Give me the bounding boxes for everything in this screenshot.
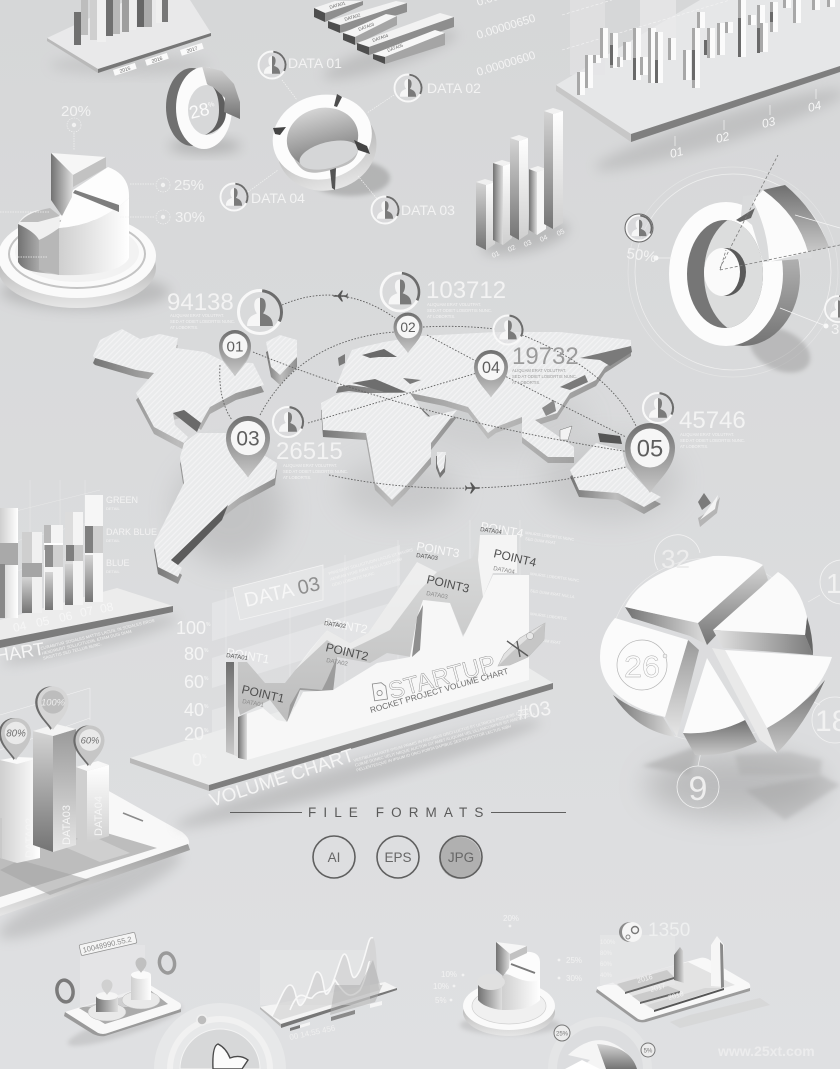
tablet axis: 40% — [600, 973, 613, 979]
circle 26 percent: 26 — [624, 649, 660, 684]
chart base platform — [130, 650, 553, 791]
header caption: ODIO LOBORTIS NUNC — [331, 570, 375, 587]
callout 26515: 26515 — [276, 438, 343, 465]
wedge top right — [713, 572, 813, 655]
callout 26515: AT LOBORTIS. — [283, 475, 311, 480]
data 03 header — [233, 565, 323, 620]
big ring chart right — [625, 155, 840, 382]
header caption: PRAESENT SOLLICITUDIN LACUS UT MAURIS — [328, 547, 414, 576]
pin 04: 04 — [482, 359, 500, 377]
callout 94138: SED AT ODIET LOBORTIS NUNC. — [170, 319, 235, 324]
column labels: 04 — [539, 234, 549, 244]
bar 03 — [0, 508, 18, 618]
bar data 04: DATA04 — [93, 796, 105, 836]
year labels: 2016 — [151, 56, 164, 65]
watermark: www.25xt.com — [717, 1043, 815, 1059]
format badge JPG: JPG — [448, 850, 474, 865]
column labels: 02 — [507, 244, 517, 254]
bar data 02 — [0, 757, 40, 863]
icon 50 percent — [625, 214, 653, 242]
axis percent labels — [176, 618, 211, 770]
mini pie labels: 10% — [433, 982, 449, 991]
column 03 — [510, 135, 528, 240]
data 03 header: DATA 03 — [242, 573, 322, 612]
exploded pie chart right — [600, 535, 840, 820]
badge right: 5% — [644, 1048, 653, 1054]
left columns — [226, 662, 247, 760]
data 02 label: DATA 02 — [427, 80, 481, 96]
axis numbers — [668, 98, 823, 161]
plane left — [333, 290, 348, 302]
donut label: 28 — [187, 99, 211, 123]
year labels — [113, 43, 204, 77]
axis percent labels: 100 — [176, 618, 206, 638]
right captions — [525, 530, 580, 645]
point labels upper: POINT4 — [479, 519, 525, 541]
africa — [321, 393, 457, 507]
wedge lower right — [712, 648, 832, 753]
badge 25 percent: 25% — [556, 1032, 569, 1038]
icon right edge — [825, 296, 840, 322]
axis numbers: 07 — [79, 603, 95, 620]
greenland — [266, 335, 297, 385]
circle 32 — [655, 535, 700, 574]
column 01 — [476, 179, 495, 250]
mini phone chart bottom — [55, 932, 185, 1053]
axis numbers: 03 — [760, 114, 777, 131]
numeric axis labels top — [475, 0, 537, 79]
chart legend: BLUE — [106, 558, 130, 568]
candlestick chart top right — [556, 0, 840, 181]
format badge EPS: EPS — [384, 850, 412, 865]
popped sector face — [753, 190, 808, 262]
point labels upper: POINT1 — [225, 645, 271, 667]
document icon — [372, 682, 388, 701]
pin 04 — [474, 350, 508, 398]
pie on round base, left — [0, 103, 205, 310]
point labels lower: POINT1 — [240, 682, 286, 706]
bar 07 — [85, 495, 103, 602]
pin 80 percent — [0, 718, 31, 760]
wedge left — [600, 618, 699, 737]
point labels lower: POINT2 — [324, 640, 370, 664]
tablet axis: 80% — [600, 951, 613, 957]
right captions: MAURIS LOBORTIS NUNC — [525, 530, 575, 542]
data labels upper: DATA02 — [324, 621, 347, 630]
pin 80 percent: 80% — [6, 729, 26, 740]
pin 03: 03 — [236, 427, 260, 450]
bar data 03 — [33, 724, 76, 852]
bottom circular graphic right — [548, 1017, 655, 1069]
bar data 03: DATA03 — [61, 805, 73, 845]
pie percent labels: 30% — [175, 209, 205, 226]
tablet year bars: 2016 — [637, 974, 654, 985]
chart legend: DETAIL — [106, 506, 120, 511]
axis numbers: 06 — [58, 608, 74, 625]
thin outline rings — [610, 558, 820, 766]
data 01 label — [258, 52, 342, 78]
small ring left — [55, 979, 75, 1003]
pin 60 percent: 60% — [81, 734, 99, 745]
small ring right — [158, 952, 176, 974]
tablet year bars: 2018 — [668, 991, 685, 1002]
block 1 — [314, 0, 363, 22]
circle right bottom — [812, 697, 840, 743]
block 5 — [373, 30, 445, 64]
data labels upper: DATA03 — [416, 553, 439, 562]
column 04 — [529, 166, 546, 235]
mini area chart bottom — [260, 938, 397, 1042]
right captions: SED DIAM ERAT — [530, 636, 562, 645]
column labels: 05 — [556, 228, 566, 238]
axis percent labels: 0 — [192, 750, 202, 770]
bar 04 — [22, 532, 42, 613]
pie percent labels — [0, 103, 205, 257]
bar 06 — [65, 512, 83, 605]
block 4: DATA04 — [372, 33, 389, 43]
right captions: MAURIS LOBORTIS — [530, 611, 567, 621]
pin 02: 02 — [400, 320, 416, 335]
number 03 label: #03 — [516, 697, 553, 725]
3d column chart centre — [476, 108, 572, 262]
axis numbers: 04 — [806, 98, 823, 115]
callout 19732: SED AT ODIET LOBORTIS NUNC. — [512, 374, 577, 379]
year labels: 2017 — [186, 46, 199, 55]
format badge AI — [313, 836, 355, 878]
startup label: STARTUP — [386, 650, 499, 705]
right captions: SED DIAM ERAT — [525, 536, 557, 545]
pie percent labels: 25% — [174, 177, 204, 194]
axis percent labels: % — [204, 728, 209, 734]
volume area chart centre — [130, 519, 580, 839]
world map — [93, 273, 746, 584]
chart legend: GREEN — [106, 495, 138, 505]
data labels lower: DATA04 — [493, 566, 516, 576]
candles shaded side — [577, 0, 830, 95]
point labels lower — [240, 546, 538, 706]
axis percent labels: 20 — [184, 724, 204, 744]
gear icon — [619, 922, 642, 942]
axis percent labels: % — [204, 676, 209, 682]
data 02 label — [394, 74, 481, 102]
point labels upper — [225, 519, 525, 667]
chart front surface — [238, 575, 529, 760]
file formats heading: FILE FORMATS — [308, 805, 490, 820]
callout 26515: SED AT ODIET LOBORTIS NUNC. — [283, 469, 348, 474]
australia — [570, 443, 661, 514]
pin 03 — [226, 416, 270, 478]
column 05 — [544, 108, 563, 229]
connector lines — [248, 80, 394, 200]
tablet axis: 60% — [600, 962, 613, 968]
mini pie labels: 30% — [566, 974, 582, 983]
bar 05 — [44, 525, 63, 610]
volume caption: PELLENTESQUE IN IPSUM ID ORCI PORTA DAPIBUS SED PORTTITOR LECTUS NIBH — [356, 723, 512, 773]
axis percent labels: % — [202, 754, 207, 760]
point labels lower: POINT3 — [425, 572, 471, 596]
stacked bar chart left — [0, 480, 180, 671]
block 3 — [343, 14, 397, 45]
column labels — [491, 228, 566, 260]
data labels upper: DATA01 — [226, 653, 249, 662]
numeric axis labels top: 0.00000600 — [475, 50, 537, 79]
chart legend: DARK BLUE — [106, 527, 157, 537]
tall cylinder — [122, 958, 160, 1009]
axis percent labels: % — [204, 704, 209, 710]
north america — [93, 329, 264, 450]
tablet axis: 100% — [600, 940, 616, 946]
ring gap — [741, 190, 812, 262]
callout 19732 — [494, 316, 579, 385]
right percent label: 3 — [831, 321, 839, 338]
pin 60 percent — [73, 726, 104, 766]
translucent bands — [212, 545, 400, 736]
new zealand — [698, 493, 720, 527]
mini chart legend: 00 14:55 456 — [289, 1023, 337, 1042]
callout 45746: ALIQUAM ERAT VOLUTPAT. — [680, 432, 734, 437]
rocket project label: ROCKET PROJECT VOLUME CHART — [369, 666, 509, 715]
wedge bottom — [683, 658, 757, 755]
callout 45746: 45746 — [679, 407, 746, 434]
circle right top — [820, 560, 840, 604]
tablet arrow bars — [674, 936, 724, 988]
circle 9 — [677, 766, 719, 808]
flight paths — [220, 295, 637, 488]
chart caption: SAGITTIS SED TELLUS NUNC. — [42, 641, 102, 661]
callout 45746: SED AT ODIET LOBORTIS NUNC. — [680, 438, 745, 443]
axis percent labels: 60 — [184, 672, 204, 692]
data labels lower: DATA01 — [242, 699, 265, 709]
callout 19732: ALIQUAM ERAT VOLUTPAT. — [512, 368, 566, 373]
data 04 label: DATA 04 — [251, 190, 305, 206]
mini tablet chart bottom — [596, 920, 770, 1028]
callout 94138: AT LOBORTIS. — [170, 325, 198, 330]
ring face — [669, 202, 783, 346]
wedge top left — [625, 556, 768, 645]
pin 01 — [219, 330, 251, 376]
pin 02 — [394, 312, 422, 353]
chart legend: DETAIL — [106, 538, 120, 543]
indonesia — [560, 426, 622, 444]
chart caption: CURABITUR SODALES MATTIS LACUS, IN SODALES EROS — [40, 618, 155, 651]
callout 94138 — [167, 289, 282, 334]
callout 103712: ALIQUAM ERAT VOLUTPAT. — [427, 302, 481, 307]
bar data 02: DATA02 — [24, 818, 36, 858]
pin 05: 05 — [637, 436, 663, 463]
pie percent labels: 20% — [61, 103, 91, 120]
data 01 label: DATA 01 — [288, 55, 342, 71]
circle 9: 9 — [689, 770, 707, 808]
tablet axis — [600, 940, 616, 979]
mini pie bottom — [433, 914, 582, 1036]
madagascar — [436, 452, 446, 478]
50 percent label: 50% — [625, 245, 658, 266]
volume caption: CURAE DONEC VELIT NEQUE AUCTOR SIT AMET ALIQUAM VEL ULLAMCORPER SIT AMET LIGULA — [354, 711, 536, 768]
mini pie labels: 5% — [435, 996, 447, 1005]
mini pie labels: 20% — [503, 914, 519, 923]
value box: 10048990.55.2 — [82, 935, 133, 955]
format badge EPS — [377, 836, 419, 878]
point labels upper: POINT2 — [323, 615, 369, 637]
circle 26 percent — [617, 640, 667, 690]
data 03 label — [372, 196, 455, 224]
right captions: MAURIS LOBORTIS NUNC — [530, 571, 580, 583]
callout 103712: 103712 — [426, 277, 506, 304]
data labels upper: DATA04 — [480, 527, 503, 536]
callout 26515 — [273, 407, 348, 480]
bar chart top left — [47, 0, 211, 77]
chart back surface — [227, 535, 517, 722]
axis numbers: 04 — [12, 618, 28, 635]
mini pie labels: 25% — [566, 956, 582, 965]
pin 01: 01 — [227, 338, 243, 355]
callout 26515: ALIQUAM ERAT VOLUTPAT. — [283, 463, 337, 468]
mini pie labels: 10% — [441, 970, 457, 979]
callout 103712 — [381, 273, 506, 319]
candles light side — [580, 0, 835, 95]
block 3: DATA03 — [358, 21, 375, 32]
ring extrusion — [686, 206, 800, 346]
callout 103712: AT LOBORTIS. — [427, 314, 455, 319]
pin 05 — [625, 423, 675, 493]
plane right — [465, 482, 480, 494]
data labels lower: DATA03 — [426, 591, 449, 601]
data labels lower: DATA02 — [326, 658, 349, 668]
callout 19732: 19732 — [512, 343, 579, 370]
block 2: DATA02 — [344, 12, 361, 22]
axis numbers: 05 — [35, 613, 51, 630]
column 02 — [493, 160, 512, 245]
south america — [154, 433, 277, 584]
format badge JPG — [439, 836, 482, 879]
year labels: 2015 — [119, 66, 132, 75]
axis numbers: 08 — [99, 599, 115, 616]
point labels lower: POINT4 — [492, 546, 538, 570]
small cylinder — [88, 980, 126, 1021]
axis percent labels: 80 — [184, 644, 204, 664]
column labels: 03 — [523, 239, 533, 249]
callout 45746 — [643, 393, 746, 449]
callout 103712: SED AT ODIET LOBORTIS NUNC. — [427, 308, 492, 313]
block 1: DATA01 — [329, 0, 346, 10]
axis percent labels: % — [206, 622, 211, 628]
column labels: 01 — [491, 250, 501, 260]
axis numbers — [0, 599, 115, 639]
axis percent labels: 40 — [184, 700, 204, 720]
callout 94138: ALIQUAM ERAT VOLUTPAT. — [170, 313, 224, 318]
chart legend — [106, 495, 157, 574]
data labels upper — [226, 527, 503, 662]
stacked horizontal blocks top — [314, 0, 460, 88]
callout 94138: 94138 — [167, 289, 234, 316]
numeric axis labels top: 0.00000650 — [475, 13, 537, 42]
volume chart title: VOLUME CHART — [207, 745, 357, 812]
format badge AI: AI — [328, 850, 340, 865]
axis numbers: 01 — [668, 144, 685, 161]
volume caption: VESTIBULUM ANTE IPSUM PRIMIS IN FAUCIBUS ORCI LUCTUS ET ULTRICES POSUERE CUBILIA — [353, 707, 532, 763]
block 4 — [357, 13, 454, 55]
chart caption: HENDRERIT SOLLICITUDIN. ETIAM DUIS DIAM — [41, 629, 132, 656]
popped sector side — [763, 185, 829, 252]
tablet year bars — [617, 970, 724, 1012]
tablet year bars: 2017 — [650, 983, 667, 994]
bar left edge — [0, 818, 2, 858]
pin 100 percent: 100% — [41, 698, 65, 708]
donut label: % — [208, 101, 215, 109]
pin 100 percent — [35, 686, 68, 730]
data 03 label: DATA 03 — [401, 202, 455, 218]
eurasia — [336, 332, 632, 463]
mini pie labels — [433, 914, 582, 1005]
callout 45746: AT LOBORTIS. — [680, 444, 708, 449]
right captions: SED DIAM ERAT NULLA — [530, 588, 575, 599]
chart legend: DETAIL — [106, 569, 120, 574]
tablet value: 1350 — [648, 920, 690, 941]
block 5: DATA05 — [387, 42, 404, 53]
block 2 — [328, 1, 407, 33]
axis percent labels: % — [204, 648, 209, 654]
point labels upper: POINT3 — [415, 539, 461, 561]
bottom circular rocket graphic — [154, 1003, 286, 1069]
header caption: AENEAN VITAE ERAT NULLA SED DIAM — [330, 556, 403, 582]
header caption — [328, 547, 417, 587]
data 04 label — [220, 184, 305, 210]
axis numbers: 02 — [714, 129, 731, 146]
bar data 04 — [76, 761, 109, 843]
callout 19732: AT LOBORTIS. — [512, 380, 540, 385]
data labels lower — [242, 566, 516, 709]
donut 28 percent — [166, 66, 241, 154]
circle 32: 32 — [661, 544, 690, 574]
segmented ring with data labels — [220, 52, 481, 224]
rocket icon — [498, 623, 545, 666]
phone with 3d pin bars bottom left — [0, 686, 190, 952]
